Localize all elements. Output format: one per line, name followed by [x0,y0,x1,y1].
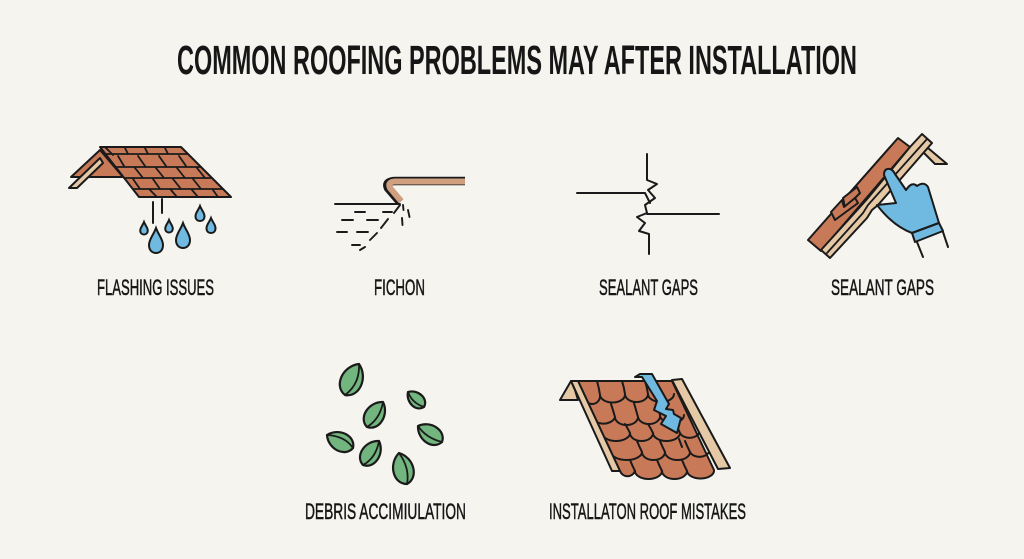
label: fichon: FICHON [374,275,425,300]
label: sealant gaps one: SEALANT GAPS [599,275,698,300]
label: debris accumulation: DEBRIS ACCIMIULATION [305,499,466,524]
panel: sealant gaps one [577,154,719,300]
icon: scalloped roof with arrow [560,374,730,479]
label: installation mistakes: INSTALLATON ROOF MISTAKES [549,499,746,524]
panel: sealant gaps two [808,134,948,300]
panel: flashing issues [69,147,231,300]
icon: leaking shingle roof [69,147,231,253]
panel: installation mistakes [549,374,746,524]
icon: bent flashing with leak [335,181,465,250]
icon: scattered leaves [327,364,443,484]
panel: fichon [335,181,465,300]
label: sealant gaps two: SEALANT GAPS [831,275,934,300]
icon: gloved hand on roof edge [808,134,948,258]
panel: debris accumulation [305,364,466,524]
icon: cracked sealant joint [577,154,719,254]
label: flashing issues: FLASHING ISSUES [97,275,214,300]
